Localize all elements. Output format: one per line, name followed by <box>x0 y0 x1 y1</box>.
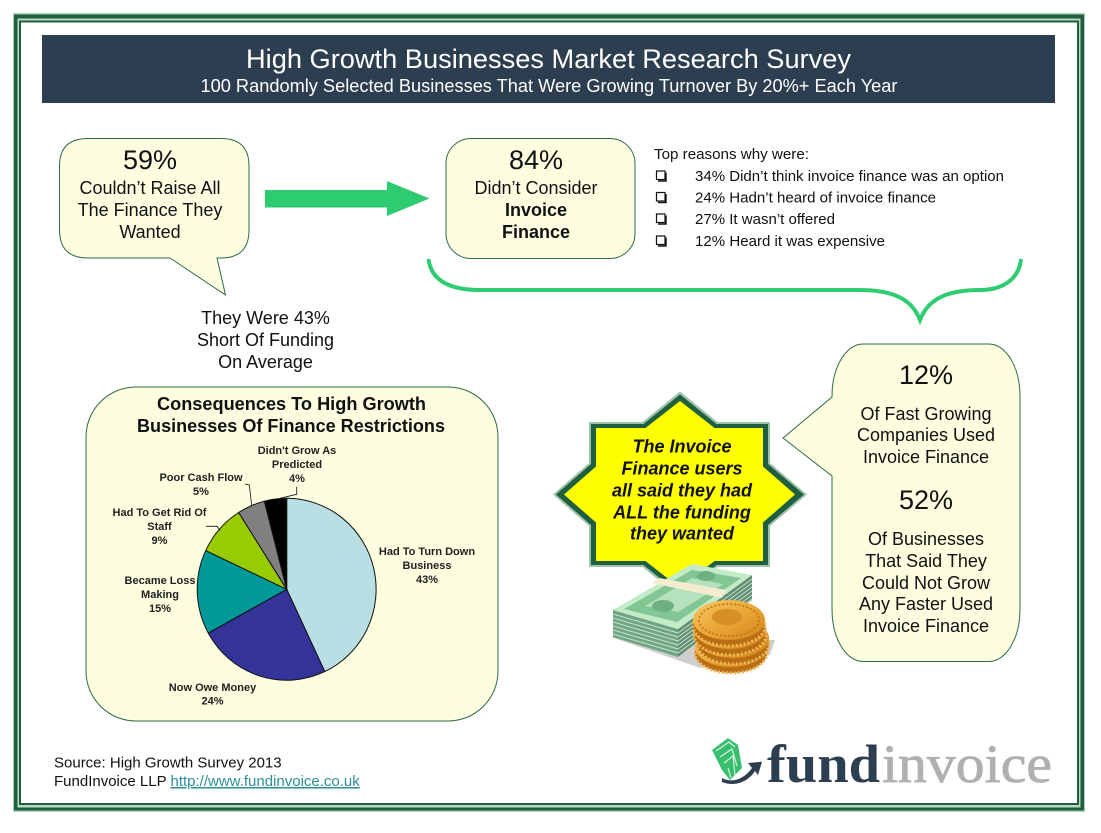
callout: 84% did not consider invoice finance: 84% <box>509 145 563 175</box>
text block: top reasons <box>654 147 1004 250</box>
icon: banknotes and coins <box>611 564 775 673</box>
callout: 59% could not raise finance <box>60 138 249 295</box>
callout: 84% did not consider invoice finance: Invoice <box>505 200 567 220</box>
text: short of funding: On Average <box>218 352 313 372</box>
chart labels: Business <box>403 560 451 572</box>
starburst: invoice finance users: The Invoice <box>632 436 732 456</box>
arrow: curly brace <box>428 259 1021 320</box>
chart labels: Became Loss <box>125 575 195 587</box>
callout: usage statistics: 12% <box>899 360 953 390</box>
starburst: invoice finance users <box>553 392 807 598</box>
heading: panel title: Consequences To High Growth <box>157 394 426 414</box>
chart labels: Staff <box>147 521 172 533</box>
callout: usage statistics: Could Not Grow <box>862 573 991 593</box>
chart labels: 24% <box>201 696 224 708</box>
text block: top reasons: Top reasons why were: <box>654 147 809 163</box>
callout: usage statistics: 52% <box>899 485 953 515</box>
text block: top reasons: 27% It wasn’t offered <box>695 212 835 228</box>
source note: Source: High Growth Survey 2013 <box>54 754 282 772</box>
chart labels: 9% <box>152 535 168 547</box>
text block: top reasons: 12% Heard it was expensive <box>695 234 885 250</box>
chart labels: Had To Turn Down <box>379 546 475 558</box>
source note: FundInvoice LLP <box>54 773 167 790</box>
subtitle: 100 Randomly Selected Businesses That Were Growing Turnover By 20%+ Each Year <box>200 76 898 96</box>
chart labels: Making <box>141 589 179 601</box>
icon: logo money and arrow <box>712 738 762 784</box>
text: short of funding: They Were 43% <box>201 308 330 328</box>
callout: 59% could not raise finance: Wanted <box>119 222 181 242</box>
chart labels: 4% <box>289 473 305 485</box>
arrow: green right arrow <box>265 181 430 216</box>
callout: 59% could not raise finance: The Finance They <box>78 200 222 220</box>
callout: 84% did not consider invoice finance: Finance <box>502 222 570 242</box>
panel: consequences of finance restrictions <box>86 387 498 721</box>
chart: pie of consequences <box>197 498 376 680</box>
callout: usage statistics: That Said They <box>865 551 987 571</box>
source note <box>54 754 360 790</box>
heading: panel title <box>137 394 445 436</box>
callout: 59% could not raise finance: 59% <box>123 145 177 175</box>
starburst: invoice finance users: all said they had <box>612 480 753 500</box>
text: short of funding: Short Of Funding <box>197 330 334 350</box>
starburst: invoice finance users: Finance users <box>621 458 743 478</box>
logo: fundinvoice <box>712 734 1052 794</box>
callout: usage statistics <box>783 344 1020 662</box>
callout: usage statistics: Invoice Finance <box>863 616 989 636</box>
callout: 59% could not raise finance: Couldn’t Raise All <box>79 178 221 198</box>
text block: top reasons: 24% Hadn’t heard of invoice finance <box>695 190 936 206</box>
chart labels: Predicted <box>272 459 322 471</box>
heading: panel title: Businesses Of Finance Restrictions <box>137 416 445 436</box>
callout: usage statistics: Any Faster Used <box>859 594 993 614</box>
chart labels: 5% <box>193 486 209 498</box>
chart labels: Poor Cash Flow <box>159 472 243 484</box>
chart labels: 15% <box>149 603 171 615</box>
text: short of funding <box>197 308 334 372</box>
logo: fundinvoice: invoice <box>882 734 1052 794</box>
title banner <box>42 35 1055 103</box>
chart labels: 43% <box>416 574 438 586</box>
callout: usage statistics: Companies Used <box>857 425 995 445</box>
logo: fundinvoice: fund <box>767 734 880 794</box>
chart labels: Had To Get Rid Of <box>113 507 207 519</box>
chart labels <box>113 445 475 708</box>
starburst: invoice finance users: they wanted <box>630 524 735 544</box>
callout: usage statistics: Invoice Finance <box>863 447 989 467</box>
chart labels: Now Owe Money <box>169 682 257 694</box>
callout: 84% did not consider invoice finance <box>446 138 635 258</box>
chart labels: Didn't Grow As <box>258 445 336 457</box>
text block: top reasons: 34% Didn’t think invoice finance was an option <box>695 169 1004 185</box>
title: High Growth Businesses Market Research Survey <box>246 44 851 74</box>
starburst: invoice finance users: ALL the funding <box>612 502 751 522</box>
source note: http://www.fundinvoice.co.uk <box>170 773 360 790</box>
callout: usage statistics: Of Businesses <box>868 529 984 549</box>
callout: usage statistics: Of Fast Growing <box>860 404 992 424</box>
callout: 84% did not consider invoice finance: Didn’t Consider <box>474 178 598 198</box>
